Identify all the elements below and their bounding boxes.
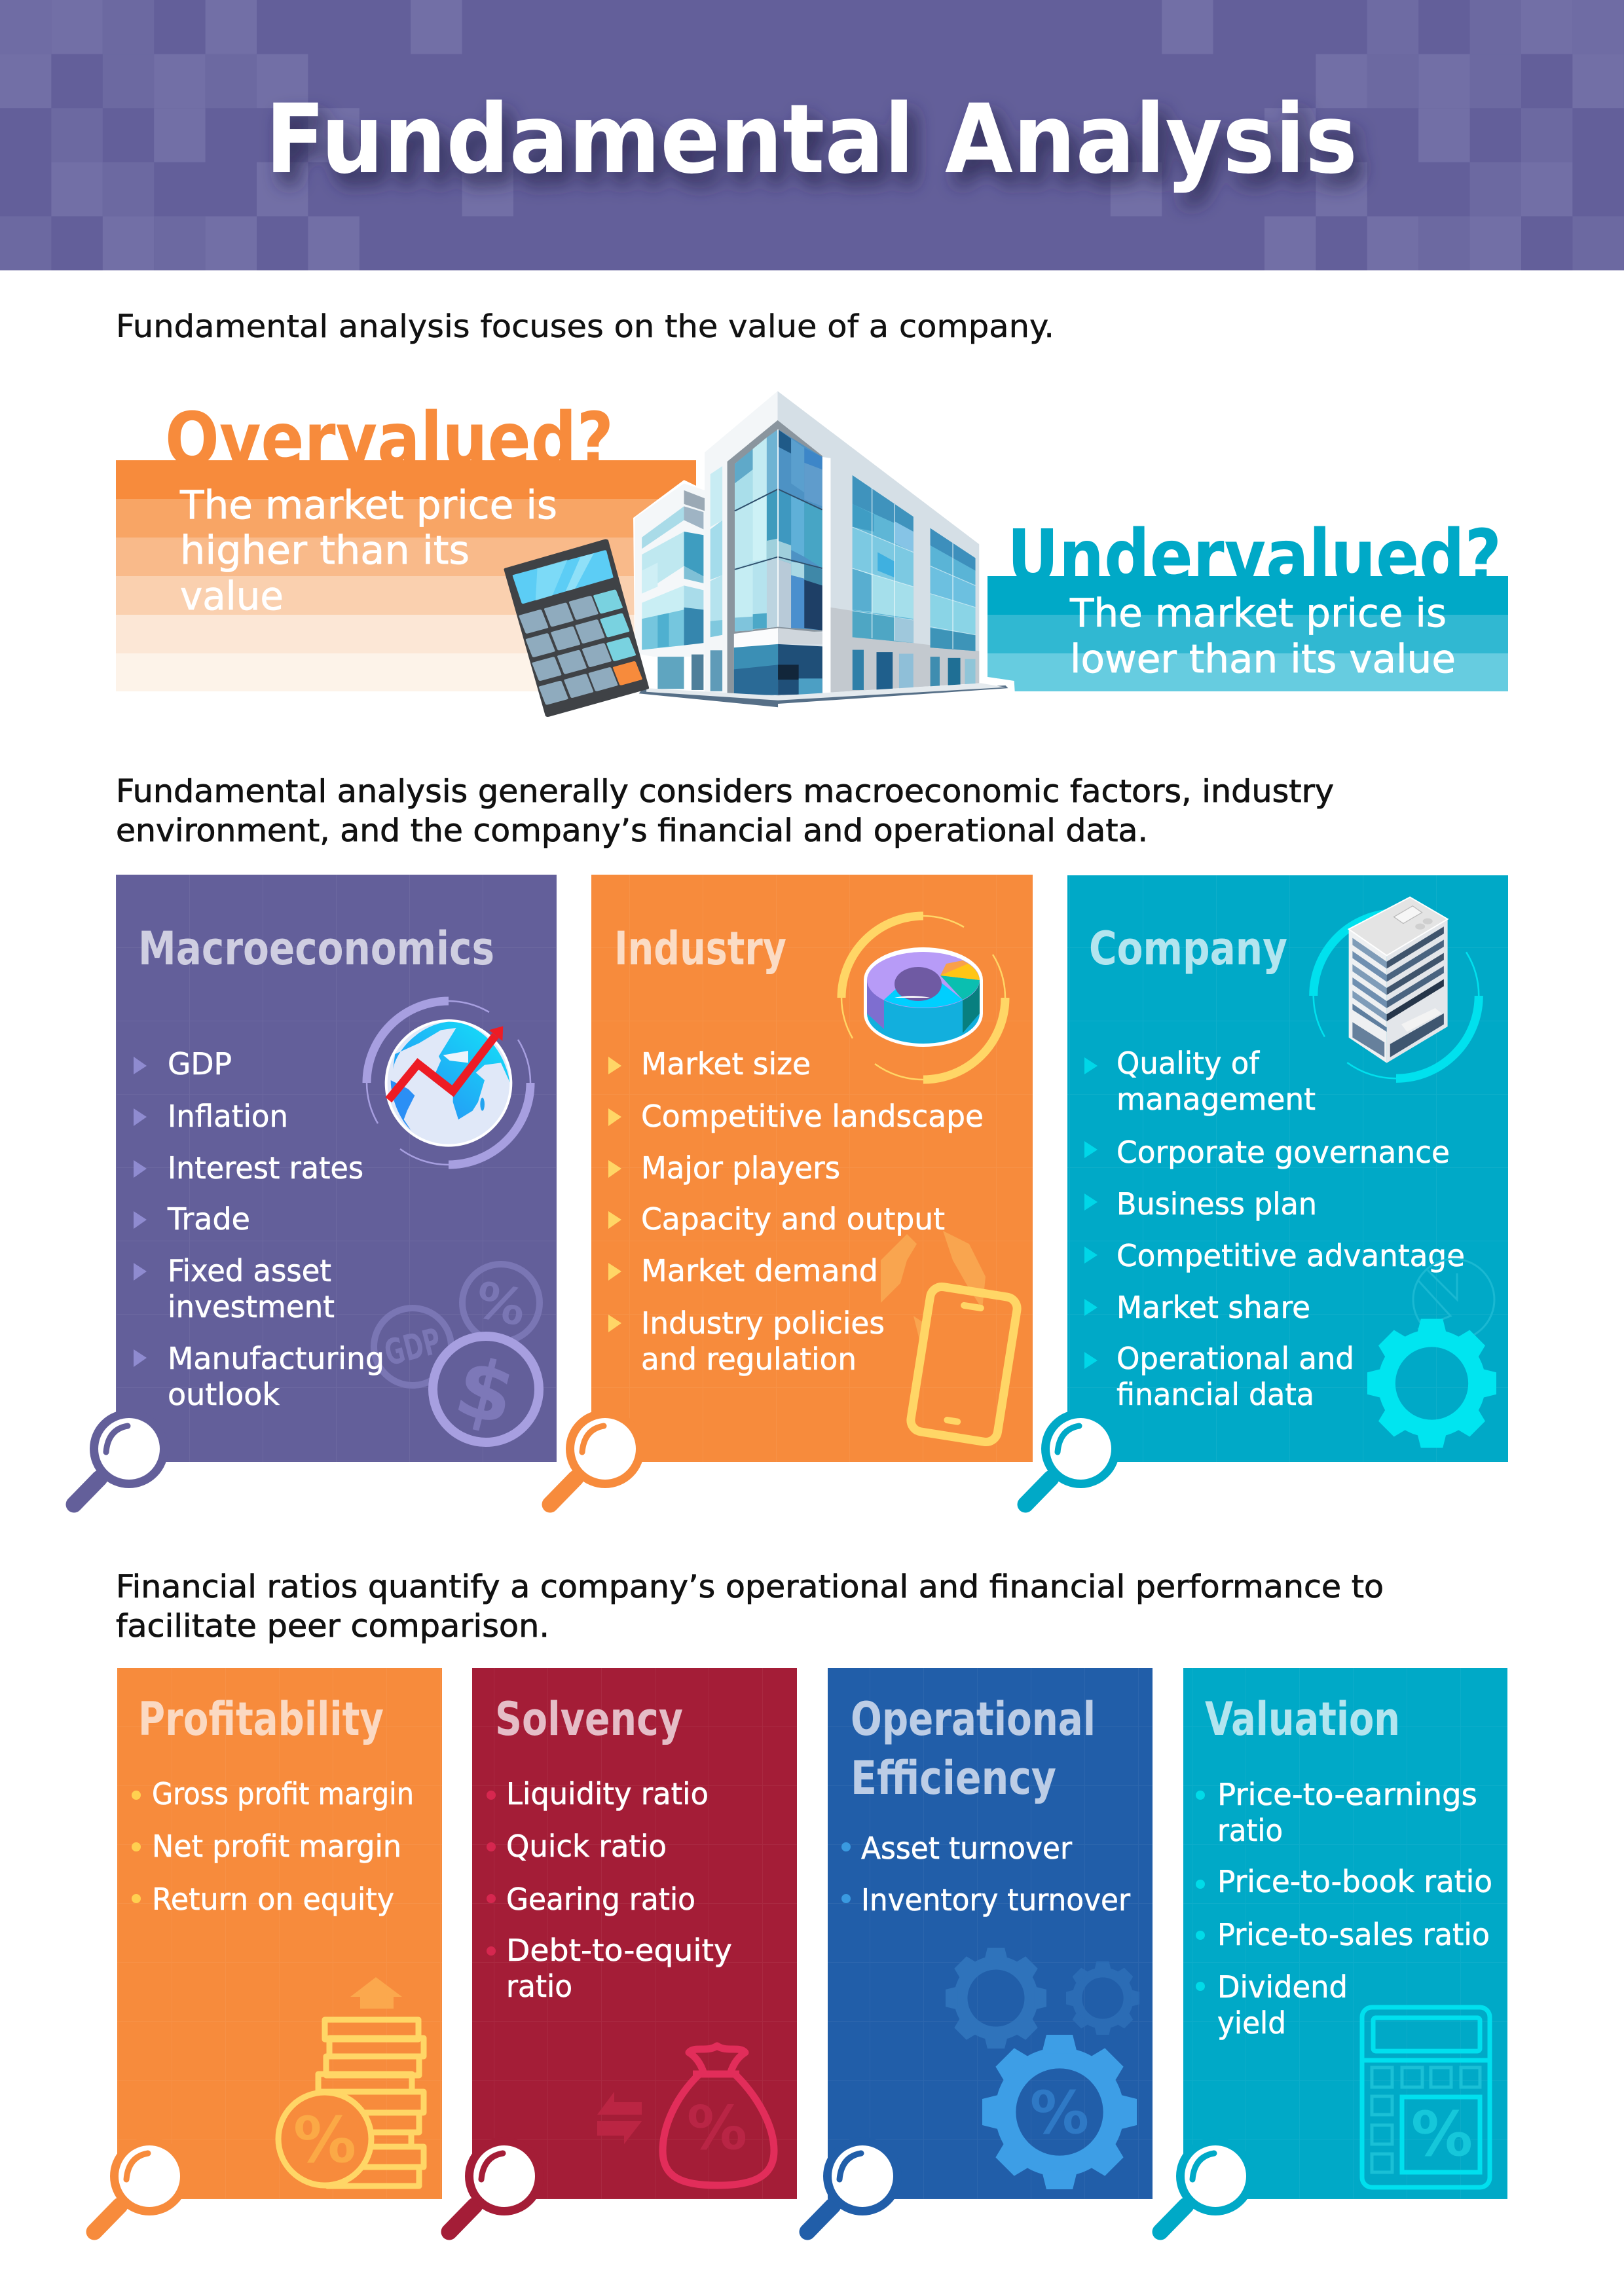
- list: valuation ratios: Price-to-book ratio: [1217, 1864, 1492, 1899]
- title: Fundamental Analysis: [265, 84, 1357, 195]
- section text: ratios: facilitate peer comparison.: [116, 1608, 549, 1645]
- list: solvency ratios: Gearing ratio: [506, 1882, 695, 1917]
- heading: valuation: Valuation: [1205, 1692, 1400, 1746]
- overvalued description: [179, 483, 557, 619]
- list: company factors: Competitive advantage: [1116, 1238, 1465, 1273]
- icon: magnifier: [74, 1410, 168, 1504]
- heading: macroeconomics: Macroeconomics: [138, 922, 494, 975]
- header banner: [0, 0, 1624, 270]
- list: valuation ratios: [1196, 1777, 1492, 2041]
- list: industry factors: Capacity and output: [641, 1201, 945, 1237]
- icon: magnifier: [1025, 1410, 1120, 1504]
- section text: ratios: [116, 1569, 1384, 1645]
- list: solvency ratios: [487, 1776, 732, 2004]
- list: industry factors: Market size: [641, 1046, 811, 1082]
- icon: money bag with percent: %: [687, 2093, 747, 2163]
- list: macro factors: Manufacturing: [168, 1341, 384, 1376]
- list: industry factors: Major players: [641, 1150, 840, 1186]
- list: solvency ratios: Liquidity ratio: [506, 1776, 709, 1812]
- list: solvency ratios: ratio: [506, 1969, 572, 2004]
- list: macro factors: Fixed asset: [168, 1253, 331, 1288]
- icon: smartphone: [909, 1285, 1019, 1444]
- list: profitability ratios: Return on equity: [152, 1882, 394, 1917]
- section text: factors: Fundamental analysis generally considers macroeconomic factors, industry: [116, 773, 1334, 810]
- list: profitability ratios: Gross profit margin: [152, 1776, 414, 1812]
- undervalued description: [1069, 591, 1456, 682]
- list: profitability ratios: [132, 1776, 414, 1917]
- panel: company: [1025, 875, 1508, 1504]
- undervalued stepped bands: [987, 576, 1508, 691]
- list: company factors: Corporate governance: [1116, 1135, 1450, 1170]
- list: company factors: management: [1116, 1082, 1316, 1117]
- icon: percent, GDP and dollar coins: [374, 1264, 540, 1444]
- overvalued description: higher than its: [180, 528, 470, 574]
- icon: percent, GDP and dollar coins: GDP: [380, 1321, 445, 1374]
- panel: operational efficiency: [807, 1668, 1153, 2232]
- heading: company: Company: [1089, 922, 1287, 975]
- icon: percent, GDP and dollar coins: $: [447, 1339, 524, 1444]
- list: macro factors: Trade: [167, 1201, 250, 1237]
- icon: outline calculator with percent: [1362, 2007, 1490, 2187]
- panel: macroeconomics: [74, 875, 557, 1504]
- list: macro factors: investment: [168, 1289, 335, 1324]
- heading: solvency: Solvency: [495, 1692, 683, 1746]
- list: valuation ratios: Dividend: [1217, 1969, 1348, 2005]
- undervalued description: lower than its value: [1070, 636, 1456, 682]
- icon: coin stack with percent: %: [293, 2104, 356, 2177]
- list: macro factors: Interest rates: [168, 1150, 363, 1186]
- icon: money bag with percent: [663, 2046, 774, 2185]
- list: macro factors: outlook: [168, 1377, 280, 1412]
- list: valuation ratios: yield: [1217, 2005, 1286, 2041]
- icon: magnifier: [94, 2137, 189, 2232]
- list: company factors: Market share: [1116, 1290, 1310, 1325]
- list: efficiency ratios: Inventory turnover: [861, 1882, 1130, 1918]
- icon: percent, GDP and dollar coins: %: [470, 1270, 531, 1338]
- list: efficiency ratios: Asset turnover: [861, 1831, 1072, 1866]
- icon: magnifier: [550, 1410, 644, 1504]
- overvalued description: value: [180, 574, 284, 619]
- list: macro factors: Inflation: [168, 1099, 288, 1134]
- overvalued description: The market price is: [179, 483, 557, 528]
- icon: coin stack with percent: [278, 2020, 424, 2186]
- panel: solvency: [449, 1668, 797, 2232]
- list: company factors: Operational and: [1116, 1341, 1354, 1376]
- list: solvency ratios: Quick ratio: [506, 1829, 667, 1864]
- icon: magnifier: [1160, 2137, 1255, 2232]
- icon: globe with rising arrow: [367, 1001, 530, 1165]
- icon: faint globe: [881, 1231, 986, 1342]
- panel: industry: [550, 875, 1033, 1504]
- list: company factors: Business plan: [1116, 1186, 1317, 1222]
- icon: gears with percent: %: [1030, 2079, 1089, 2147]
- panel: valuation: [1160, 1668, 1507, 2232]
- list: solvency ratios: Debt-to-equity: [506, 1933, 732, 1968]
- section text: factors: environment, and the company’s financial and operational data.: [116, 812, 1148, 849]
- heading: operational efficiency: [851, 1692, 1096, 1805]
- list: industry factors: Market demand: [641, 1253, 878, 1288]
- heading: operational efficiency: Efficiency: [851, 1751, 1056, 1805]
- undervalued description: The market price is: [1069, 591, 1447, 636]
- icon: faint pie chart: [1413, 1259, 1494, 1340]
- list: valuation ratios: Price-to-earnings: [1217, 1777, 1477, 1812]
- list: macro factors: [134, 1046, 384, 1412]
- illustration: office building: [633, 390, 1015, 711]
- icon: up arrow: [350, 1977, 402, 2009]
- icon: exchange arrows: [597, 2092, 642, 2144]
- heading: industry: Industry: [614, 922, 786, 975]
- panel: profitability: [94, 1668, 442, 2232]
- list: valuation ratios: ratio: [1217, 1813, 1283, 1848]
- list: macro factors: GDP: [168, 1046, 232, 1082]
- undervalued heading: Undervalued?: [1007, 515, 1502, 600]
- icon: gears with percent: [946, 1948, 1139, 2189]
- overvalued stepped bands: [116, 460, 696, 691]
- icon: magnifier: [449, 2137, 544, 2232]
- heading: profitability: Profitability: [138, 1692, 384, 1746]
- illustration: calculator: [506, 541, 646, 716]
- list: valuation ratios: Price-to-sales ratio: [1217, 1917, 1490, 1952]
- intro text: Fundamental analysis focuses on the value of a company.: [116, 308, 1054, 345]
- list: industry factors: and regulation: [641, 1341, 857, 1377]
- icon: 3D donut chart: [841, 916, 1005, 1080]
- heading: operational efficiency: Operational: [851, 1692, 1096, 1746]
- icon: gear: [1367, 1319, 1496, 1448]
- overvalued heading: Overvalued?: [165, 397, 614, 483]
- list: company factors: financial data: [1116, 1377, 1314, 1412]
- icon: outline calculator with percent: %: [1411, 2099, 1473, 2170]
- icon: magnifier: [807, 2137, 902, 2232]
- section text: ratios: Financial ratios quantify a company’s operational and financial performance to: [116, 1569, 1384, 1605]
- list: company factors: Quality of: [1116, 1046, 1261, 1081]
- list: industry factors: Industry policies: [641, 1305, 885, 1341]
- list: profitability ratios: Net profit margin: [152, 1829, 401, 1864]
- icon: isometric office tower: [1314, 897, 1479, 1078]
- section text: factors: [116, 773, 1334, 849]
- list: industry factors: Competitive landscape: [641, 1099, 984, 1134]
- list: efficiency ratios: [841, 1831, 1130, 1918]
- list: industry factors: [608, 1046, 984, 1377]
- list: company factors: [1084, 1046, 1465, 1412]
